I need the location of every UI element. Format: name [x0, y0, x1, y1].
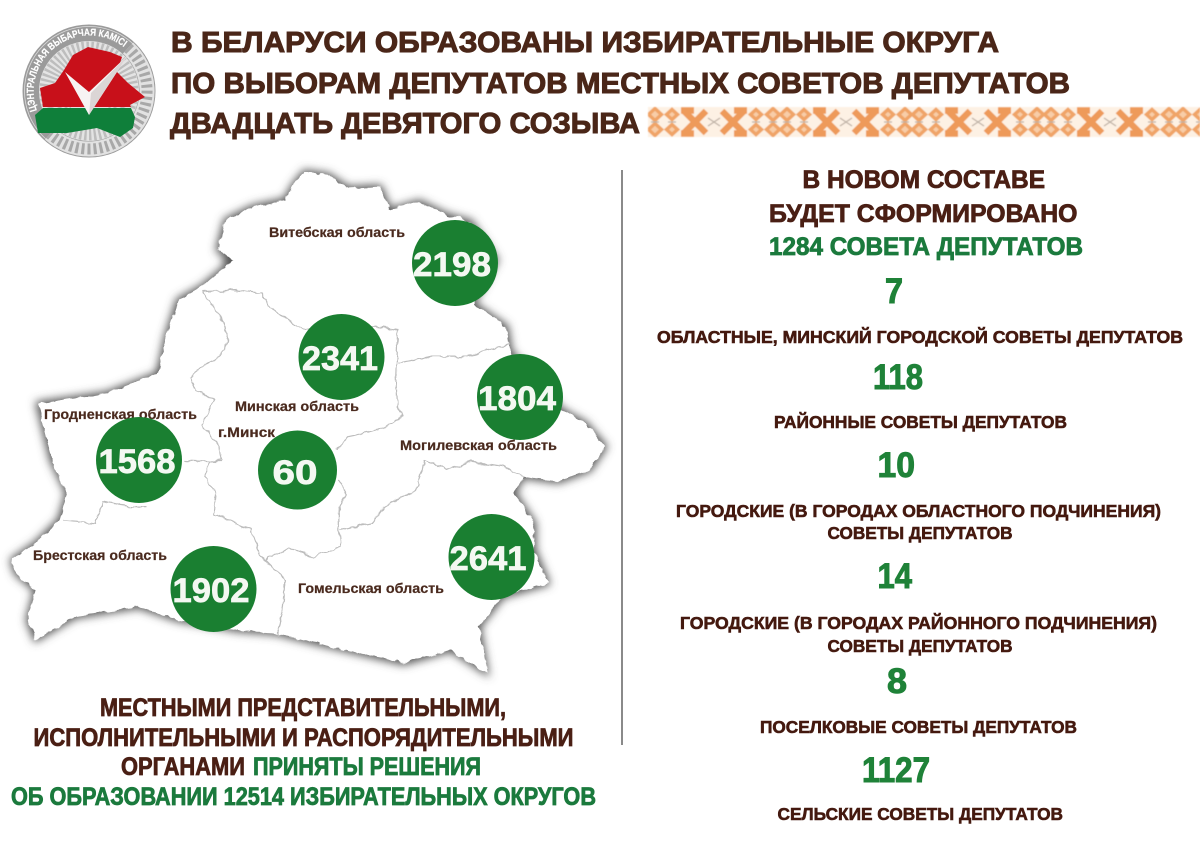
region labels	[33, 225, 557, 596]
ornament band	[648, 107, 1200, 137]
stat: 10 city councils, regional subordination	[676, 446, 1161, 543]
stat: 8 settlement councils	[760, 662, 1077, 737]
badge: Minsk region 2341: 2341	[302, 340, 378, 378]
map of Belarus	[12, 172, 605, 673]
bottom-left text block: ИСПОЛНИТЕЛЬНЫМИ И РАСПОРЯДИТЕЛЬНЫМИ	[34, 724, 574, 752]
stat: 118 district councils	[774, 358, 1067, 432]
stat: 7 regional councils	[657, 272, 1183, 347]
badge: Brest 1902	[170, 546, 256, 632]
stat: 14 city councils, district subordination: 14	[878, 557, 912, 596]
logo map with flag colours	[35, 47, 145, 137]
title: ДВАДЦАТЬ ДЕВЯТОГО СОЗЫВА	[170, 108, 640, 140]
badge: Minsk region 2341	[298, 314, 384, 400]
badge: Vitebsk 2198: 2198	[413, 246, 491, 284]
right column heading	[769, 166, 1083, 261]
stat: 10 city councils, regional subordination: ГОРОДСКИЕ (В ГОРОДАХ ОБЛАСТНОГО ПОДЧИНЕНИЯ)	[676, 501, 1161, 521]
badge: Mogilev 1804	[477, 354, 563, 440]
stat: 14 city councils, district subordination: ГОРОДСКИЕ (В ГОРОДАХ РАЙОННОГО ПОДЧИНЕНИЯ)	[680, 612, 1157, 633]
region labels: Гомельская область	[298, 581, 444, 596]
stat: 118 district councils: 118	[873, 358, 923, 397]
right column heading: БУДЕТ СФОРМИРОВАНО	[769, 200, 1078, 228]
badge: Brest 1902: 1902	[172, 572, 250, 610]
stat: 1127 rural councils: СЕЛЬСКИЕ СОВЕТЫ ДЕПУТАТОВ	[778, 804, 1063, 824]
bottom-left text block	[11, 694, 596, 811]
stat: 7 regional councils: ОБЛАСТНЫЕ, МИНСКИЙ ГОРОДСКОЙ СОВЕТЫ ДЕПУТАТОВ	[657, 326, 1183, 347]
stat: 14 city councils, district subordination: СОВЕТЫ ДЕПУТАТОВ	[828, 636, 1012, 656]
right column heading: В НОВОМ СОСТАВЕ	[802, 166, 1045, 194]
bottom-left text block: ОБ ОБРАЗОВАНИИ 12514 ИЗБИРАТЕЛЬНЫХ ОКРУГОВ	[11, 783, 596, 811]
stat: 1127 rural councils	[778, 751, 1063, 824]
region labels: Минская область	[235, 399, 359, 414]
region labels: Витебская область	[269, 225, 405, 240]
bottom-left text block: МЕСТНЫМИ ПРЕДСТАВИТЕЛЬНЫМИ,	[100, 694, 506, 722]
title	[170, 27, 1070, 140]
stat: 8 settlement councils: 8	[887, 662, 907, 701]
badge: Grodno 1568	[96, 417, 182, 503]
logo ring text	[34, 35, 125, 111]
badge: Minsk city 60: 60	[272, 454, 318, 492]
region labels: Могилевская область	[400, 438, 557, 453]
stat: 14 city councils, district subordination	[680, 557, 1157, 656]
bottom-left text block: ПРИНЯТЫ РЕШЕНИЯ	[253, 753, 481, 781]
badge: Mogilev 1804: 1804	[478, 380, 556, 418]
title: В БЕЛАРУСИ ОБРАЗОВАНЫ ИЗБИРАТЕЛЬНЫЕ ОКРУГА	[171, 27, 999, 59]
right column heading: 1284 СОВЕТА ДЕПУТАТОВ	[769, 233, 1083, 261]
stat: 7 regional councils: 7	[885, 272, 903, 311]
bottom-left text block: ОРГАНАМИ	[121, 753, 245, 781]
stat: 10 city councils, regional subordination: СОВЕТЫ ДЕПУТАТОВ	[828, 523, 1012, 543]
stat: 8 settlement councils: ПОСЕЛКОВЫЕ СОВЕТЫ ДЕПУТАТОВ	[760, 717, 1077, 737]
stat: 118 district councils: РАЙОННЫЕ СОВЕТЫ ДЕПУТАТОВ	[774, 411, 1067, 432]
logo: Central Election Commission emblem	[22, 24, 156, 158]
badge: Vitebsk 2198	[412, 220, 498, 306]
region borders	[63, 290, 522, 637]
badge: Minsk city 60	[258, 430, 337, 510]
title: ПО ВЫБОРАМ ДЕПУТАТОВ МЕСТНЫХ СОВЕТОВ ДЕПУТАТОВ	[171, 68, 1070, 100]
map shadow	[12, 172, 605, 673]
region labels: Брестская область	[33, 548, 167, 563]
map land	[12, 172, 605, 673]
badge: Gomel 2641	[448, 514, 534, 600]
badge: Gomel 2641: 2641	[450, 540, 526, 578]
badge: Grodno 1568: 1568	[98, 443, 176, 481]
stat: 10 city councils, regional subordination: 10	[878, 446, 915, 485]
region labels: Гродненская область	[44, 407, 197, 422]
stat: 1127 rural councils: 1127	[862, 751, 930, 790]
region labels: г.Минск	[218, 425, 275, 440]
